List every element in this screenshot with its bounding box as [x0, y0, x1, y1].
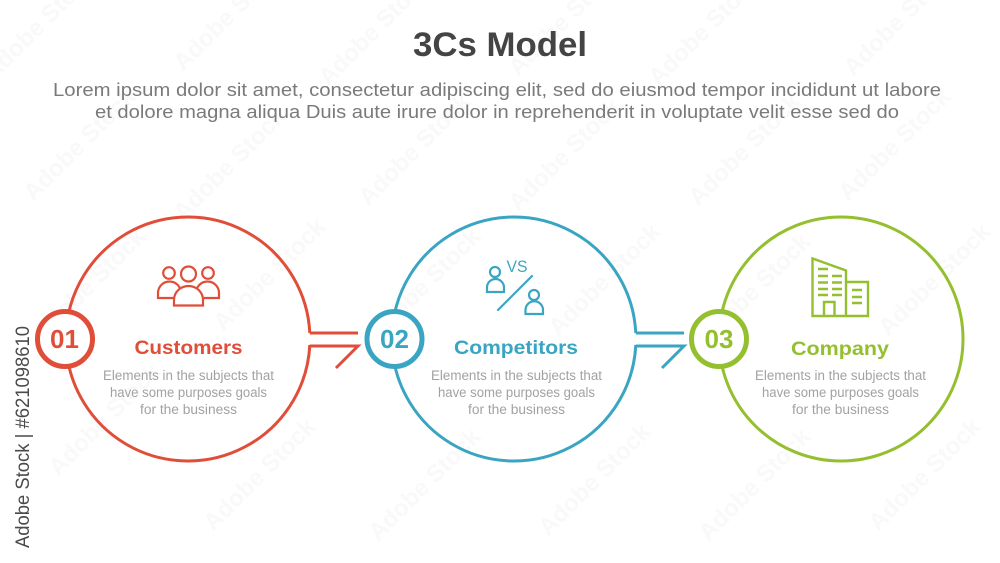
number badge: 01: [38, 312, 92, 366]
body text: competitors: have some purposes goals: [438, 385, 595, 400]
ring: customers: [66, 217, 310, 461]
intro text: [53, 79, 941, 122]
text: Adobe Stock: [503, 93, 627, 216]
intro text: et dolore magna aliqua Duis aute irure dolor in reprehenderit in voluptate velit esse sed do: [95, 101, 899, 122]
text: Adobe Stock: [363, 423, 487, 546]
icon: customers group: [158, 266, 219, 306]
body text: competitors: Elements in the subjects that: [431, 368, 602, 383]
number badge: 02: 02: [380, 324, 409, 354]
text: Adobe Stock: [353, 88, 477, 211]
body text: competitors: [431, 368, 602, 417]
watermark: stock id: Adobe Stock | #621098610: [13, 326, 34, 548]
heading: company: Company: [791, 339, 889, 360]
text: Adobe Stock: [208, 213, 332, 336]
body text: company: [755, 368, 926, 417]
heading: customers: Customers: [134, 338, 242, 359]
text: Adobe Stock: [43, 358, 167, 481]
arrow: competitors to company: [636, 333, 684, 368]
text: Adobe Stock: [363, 223, 487, 346]
icon: versus: [487, 257, 543, 314]
number badge: 01: 01: [50, 324, 79, 354]
body text: company: for the business: [792, 402, 889, 417]
arrow: customers to competitors: [310, 333, 358, 368]
body text: company: Elements in the subjects that: [755, 368, 926, 383]
text: Adobe Stock: [873, 218, 997, 341]
title: 3Cs Model: [413, 26, 587, 64]
body text: company: have some purposes goals: [762, 385, 919, 400]
text: Adobe Stock: [28, 223, 152, 346]
body text: customers: [103, 368, 274, 417]
icon: building: [812, 258, 868, 316]
text: Adobe Stock: [198, 413, 322, 536]
intro text: Lorem ipsum dolor sit amet, consectetur adipiscing elit, sed do eiusmod tempor incididunt ut labore: [53, 79, 941, 100]
body text: customers: have some purposes goals: [110, 385, 267, 400]
text: Adobe Stock: [168, 103, 292, 226]
text: Adobe Stock: [833, 83, 957, 206]
ring: competitors: [392, 217, 636, 461]
text: Adobe Stock: [693, 228, 817, 351]
panel: competitors: [367, 217, 684, 461]
number badge: 03: [692, 312, 746, 366]
number badge: 03: 03: [705, 324, 733, 354]
ring: company: [719, 217, 963, 461]
heading: competitors: Competitors: [454, 338, 578, 359]
text: Adobe Stock: [693, 423, 817, 546]
text: Adobe Stock: [543, 218, 667, 341]
body text: customers: Elements in the subjects that: [103, 368, 274, 383]
text: Adobe Stock: [18, 83, 142, 206]
text: Adobe Stock: [683, 88, 807, 211]
text: Adobe Stock: [533, 418, 657, 541]
body text: competitors: for the business: [468, 402, 565, 417]
body text: customers: for the business: [140, 402, 237, 417]
panel: company: [692, 217, 963, 461]
icon: versus: VS: [506, 257, 528, 276]
panel: customers: [38, 217, 358, 461]
text: Adobe Stock: [863, 413, 987, 536]
number badge: 02: [367, 312, 422, 366]
